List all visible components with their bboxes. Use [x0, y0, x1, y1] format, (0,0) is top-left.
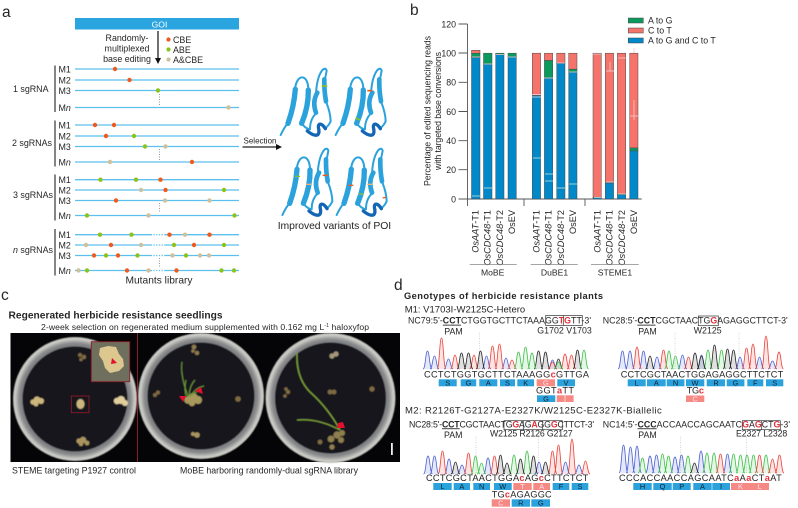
y axis: 80: [446, 78, 456, 88]
amino acids NC79: V: [564, 378, 569, 388]
label: randomly-multiplexed base editing: Randomly-: [106, 33, 148, 43]
amino acids NC28 R2126: L: [440, 482, 445, 491]
arrow: base editing: [155, 31, 161, 64]
genotype NC28 R2126: CCTCGCTAACTGGAcAGcCTTCTCT: [426, 473, 589, 483]
x axis labels: OsCDC48-T2: [556, 210, 566, 266]
GOI bar: [75, 18, 239, 30]
x axis labels: OsEV: [568, 209, 578, 234]
legend: A to G and C to T: [648, 36, 716, 46]
x axis labels: OsAAT-T1: [532, 210, 542, 253]
x axis labels: OsCDC48-T1: [482, 210, 492, 266]
y axis: 60: [446, 107, 456, 117]
y axis: 20: [446, 165, 456, 175]
panel label c: c: [1, 287, 9, 304]
genotype NC28 R2126: [409, 419, 594, 508]
x axis labels: OsEV: [629, 209, 639, 234]
amino acids NC28 R2126: R: [518, 499, 523, 508]
amino acids NC14: A: [700, 482, 705, 491]
panel c subheading: -1: [324, 323, 329, 329]
amino acids NC28 R2126: TGcAGAGGC: [492, 490, 552, 500]
panel c subheading: haloxyfop: [329, 322, 369, 332]
captions: [12, 466, 359, 476]
chromatogram NC79: [423, 338, 588, 369]
label: randomly-multiplexed base editing: base editing: [103, 54, 151, 64]
protein variant 4: [337, 149, 387, 215]
amino acids NC14: K: [738, 482, 743, 491]
amino acids NC28 W2125: W: [692, 378, 699, 388]
genotype NC14: CCCACCAACCAGCAATCaAaCTaAT: [619, 473, 782, 483]
genotype NC14: [603, 419, 790, 491]
x axis labels: OsCDC48-T1: [544, 210, 554, 266]
group labels: [470, 264, 639, 278]
amino acids NC14: P: [679, 482, 684, 491]
genotype NC79: G1702 V1703: [537, 326, 592, 336]
genotype NC28 W2125: NC28:5'-CCTCGCTAACTGGAGAGGCTTCT-3': [603, 316, 788, 326]
amino acids NC79: G: [543, 394, 549, 404]
legend: editors: ABE: [173, 45, 191, 55]
genotype NC79: [408, 316, 592, 404]
amino acids NC28 W2125: C: [692, 394, 698, 404]
group: 1 sgRNA: M2: [58, 76, 71, 86]
legend: editors: CBE: [173, 35, 191, 45]
group: 3 sgRNAs: M1: [58, 175, 71, 185]
y axis: 100: [441, 48, 456, 58]
error bars: [472, 48, 638, 198]
genotype NC28 R2126: PAM: [444, 430, 462, 440]
group: n sgRNAs: n sgRNAs: [13, 245, 54, 255]
arrow: selection: Selection: [244, 136, 276, 146]
x axis labels: OsAAT-T1: [470, 210, 480, 253]
group: 1 sgRNA: M3: [58, 86, 71, 96]
amino acids NC79: G: [466, 378, 472, 388]
amino acids NC14: Q: [660, 482, 666, 491]
y axis: [441, 19, 642, 206]
legend: editors: [166, 35, 203, 65]
M1 title: M1: V1703I-W2125C-Hetero: [405, 305, 525, 316]
genotype NC14: E2327 L2328: [736, 428, 787, 438]
x axis labels: OsCDC48-T2: [617, 210, 627, 266]
amino acids NC14: L: [757, 482, 762, 491]
group: 2 sgRNAs: M2: [58, 132, 71, 142]
amino acids NC79: G: [543, 378, 549, 388]
panel label b: b: [410, 2, 419, 19]
group: 2 sgRNAs: Mn: [58, 158, 71, 168]
scale bar: [391, 443, 393, 455]
panel d heading: Genotypes of herbicide resistance plants: [404, 291, 603, 301]
amino acids NC28 W2125: G: [733, 378, 739, 388]
genotype NC14: PAM: [638, 430, 657, 440]
amino acids NC28 W2125: [628, 378, 783, 404]
captions: STEME targeting P1927 control: [12, 466, 136, 476]
photo panel: plates: [10, 333, 400, 463]
group: 2 sgRNAs: M3: [58, 142, 71, 152]
group: n sgRNAs: M3: [58, 251, 71, 261]
amino acids NC28 W2125: F: [753, 378, 758, 388]
y axis: 120: [441, 19, 456, 29]
group: 3 sgRNAs: [13, 174, 239, 221]
x axis labels: OsAAT-T1: [592, 210, 602, 253]
amino acids NC28 W2125: A: [654, 378, 659, 388]
amino acids NC28 R2126: C: [498, 499, 504, 508]
x axis labels: [470, 209, 639, 266]
genotype NC28 R2126: NC28:5'-CCTCGCTAACTGGAGAGGGCTTCT-3': [409, 419, 594, 429]
group labels: STEME1: [598, 268, 632, 278]
M2 title: M2: R2126T-G2127A-E2327K/W2125C-E2327K-Biallelic: [405, 405, 662, 416]
y axis title: with targeted base conversions: [433, 51, 443, 171]
group: 2 sgRNAs: [12, 120, 239, 168]
red divider: [136, 333, 138, 462]
amino acids NC28 W2125: S: [772, 378, 777, 388]
genotype NC79: PAM: [444, 327, 463, 337]
group: n sgRNAs: M2: [58, 240, 71, 250]
dish 3: [266, 333, 396, 463]
inset: callus close-up: [91, 342, 130, 382]
amino acids NC79: S: [505, 378, 510, 388]
genotype NC28 W2125: W2125: [694, 326, 722, 336]
chromatogram NC14: [619, 445, 784, 473]
amino acids NC28 R2126: A: [539, 482, 544, 491]
group labels: DuBE1: [541, 268, 568, 278]
arrow: selection: [242, 136, 282, 150]
amino acids NC28 W2125: L: [635, 378, 639, 388]
genotype NC28 W2125: CCTCGCTAACTGGAGAGGCTTCTCT: [621, 369, 784, 379]
panel label d: d: [394, 277, 403, 294]
group: 1 sgRNA: 1 sgRNA: [13, 84, 49, 94]
amino acids NC14: [633, 482, 769, 491]
amino acids NC79: GGTaTT: [536, 385, 574, 395]
group: n sgRNAs: [13, 229, 239, 276]
group: n sgRNAs: M1: [58, 230, 71, 240]
amino acids NC28 W2125: R: [713, 378, 719, 388]
panel c subheading: 2-week selection on regenerated medium supplemented with 0.162 mg L: [41, 322, 324, 332]
amino acids NC14: I: [720, 482, 722, 491]
group: 2 sgRNAs: M1: [58, 120, 71, 130]
amino acids NC28 R2126: T: [520, 482, 525, 491]
amino acids NC28 W2125: N: [673, 378, 678, 388]
group: n sgRNAs: Mn: [58, 266, 71, 276]
group: 3 sgRNAs: M2: [58, 186, 71, 196]
protein variant 3: [282, 149, 332, 215]
y axis: 40: [446, 136, 456, 146]
x axis labels: OsCDC48-T1: [604, 210, 614, 266]
selection box: [71, 396, 89, 413]
group: 1 sgRNA: Mn: [58, 103, 71, 113]
legend: C to T: [648, 26, 672, 36]
amino acids NC28 R2126: F: [559, 482, 564, 491]
protein variant 1: [281, 69, 331, 135]
legend: [628, 16, 716, 46]
panel a: base editing library: [12, 18, 239, 286]
amino acids NC28 R2126: [433, 482, 588, 508]
y axis: 0: [451, 194, 456, 204]
amino acids NC28 W2125: TGc: [687, 386, 704, 396]
label: randomly-multiplexed base editing: multiplexed: [105, 44, 150, 54]
amino acids NC79: [439, 378, 575, 404]
amino acids NC79: K: [523, 378, 528, 388]
genotype NC79: NC79:5'-CCTCTGGTGCTTCTAAAGGTGTT-3': [408, 316, 591, 326]
captions: MoBE harboring randomly-dual sgRNA library: [180, 466, 359, 476]
genotype NC28 W2125: PAM: [638, 327, 657, 337]
genotype NC28 W2125: [603, 316, 788, 404]
group: 3 sgRNAs: Mn: [58, 211, 71, 221]
chromatogram NC28 W2125: [618, 336, 784, 369]
bars: [472, 50, 638, 199]
dish 1: [13, 337, 137, 461]
label: randomly-multiplexed base editing: [103, 33, 151, 64]
y axis title: Percentage of edited sequencing reads: [422, 35, 432, 186]
group labels: MoBE: [481, 268, 505, 278]
x axis labels: OsEV: [507, 209, 517, 234]
amino acids NC14: H: [640, 482, 645, 491]
arrowheads: shoots: [179, 387, 345, 428]
genotype NC14: NC14:5'-CCCACCAACCAGCAATCGAGCTG-3': [603, 419, 790, 429]
y axis title: [422, 35, 443, 186]
protein variant 2: [336, 69, 386, 135]
legend: A to G: [648, 16, 673, 26]
amino acids NC28 R2126: G: [538, 499, 544, 508]
legend: editors: A&CBE: [173, 55, 203, 65]
group: 2 sgRNAs: 2 sgRNAs: [12, 138, 53, 148]
group: 1 sgRNA: M1: [58, 64, 71, 74]
genotype NC79: CCTCTGGTGCTTCTAAAGGcGTTGA: [424, 369, 590, 379]
panel c heading: Regenerated herbicide resistance seedlings: [8, 311, 223, 322]
amino acids NC28 R2126: N: [479, 482, 484, 491]
x axis labels: OsCDC48-T2: [495, 210, 505, 266]
label: improved variants: Improved variants of POI: [278, 221, 391, 232]
amino acids NC79: A: [486, 378, 491, 388]
dish 2: [138, 333, 264, 459]
amino acids NC28 R2126: W: [499, 482, 506, 491]
GOI bar: GOI: [152, 20, 167, 30]
chromatogram NC28 R2126: [424, 439, 590, 474]
group: 3 sgRNAs: 3 sgRNAs: [13, 190, 54, 200]
amino acids NC28 R2126: S: [578, 482, 583, 491]
panel label a: a: [2, 4, 11, 21]
group: 1 sgRNA: [13, 64, 239, 113]
genotype NC28 R2126: W2125 R2126 G2127: [490, 428, 573, 438]
panel b: stacked bar chart: [422, 16, 716, 278]
group: 3 sgRNAs: M3: [58, 196, 71, 206]
label: mutants library: Mutants library: [126, 276, 193, 286]
amino acids NC79: S: [445, 378, 450, 388]
amino acids NC28 R2126: A: [459, 482, 464, 491]
